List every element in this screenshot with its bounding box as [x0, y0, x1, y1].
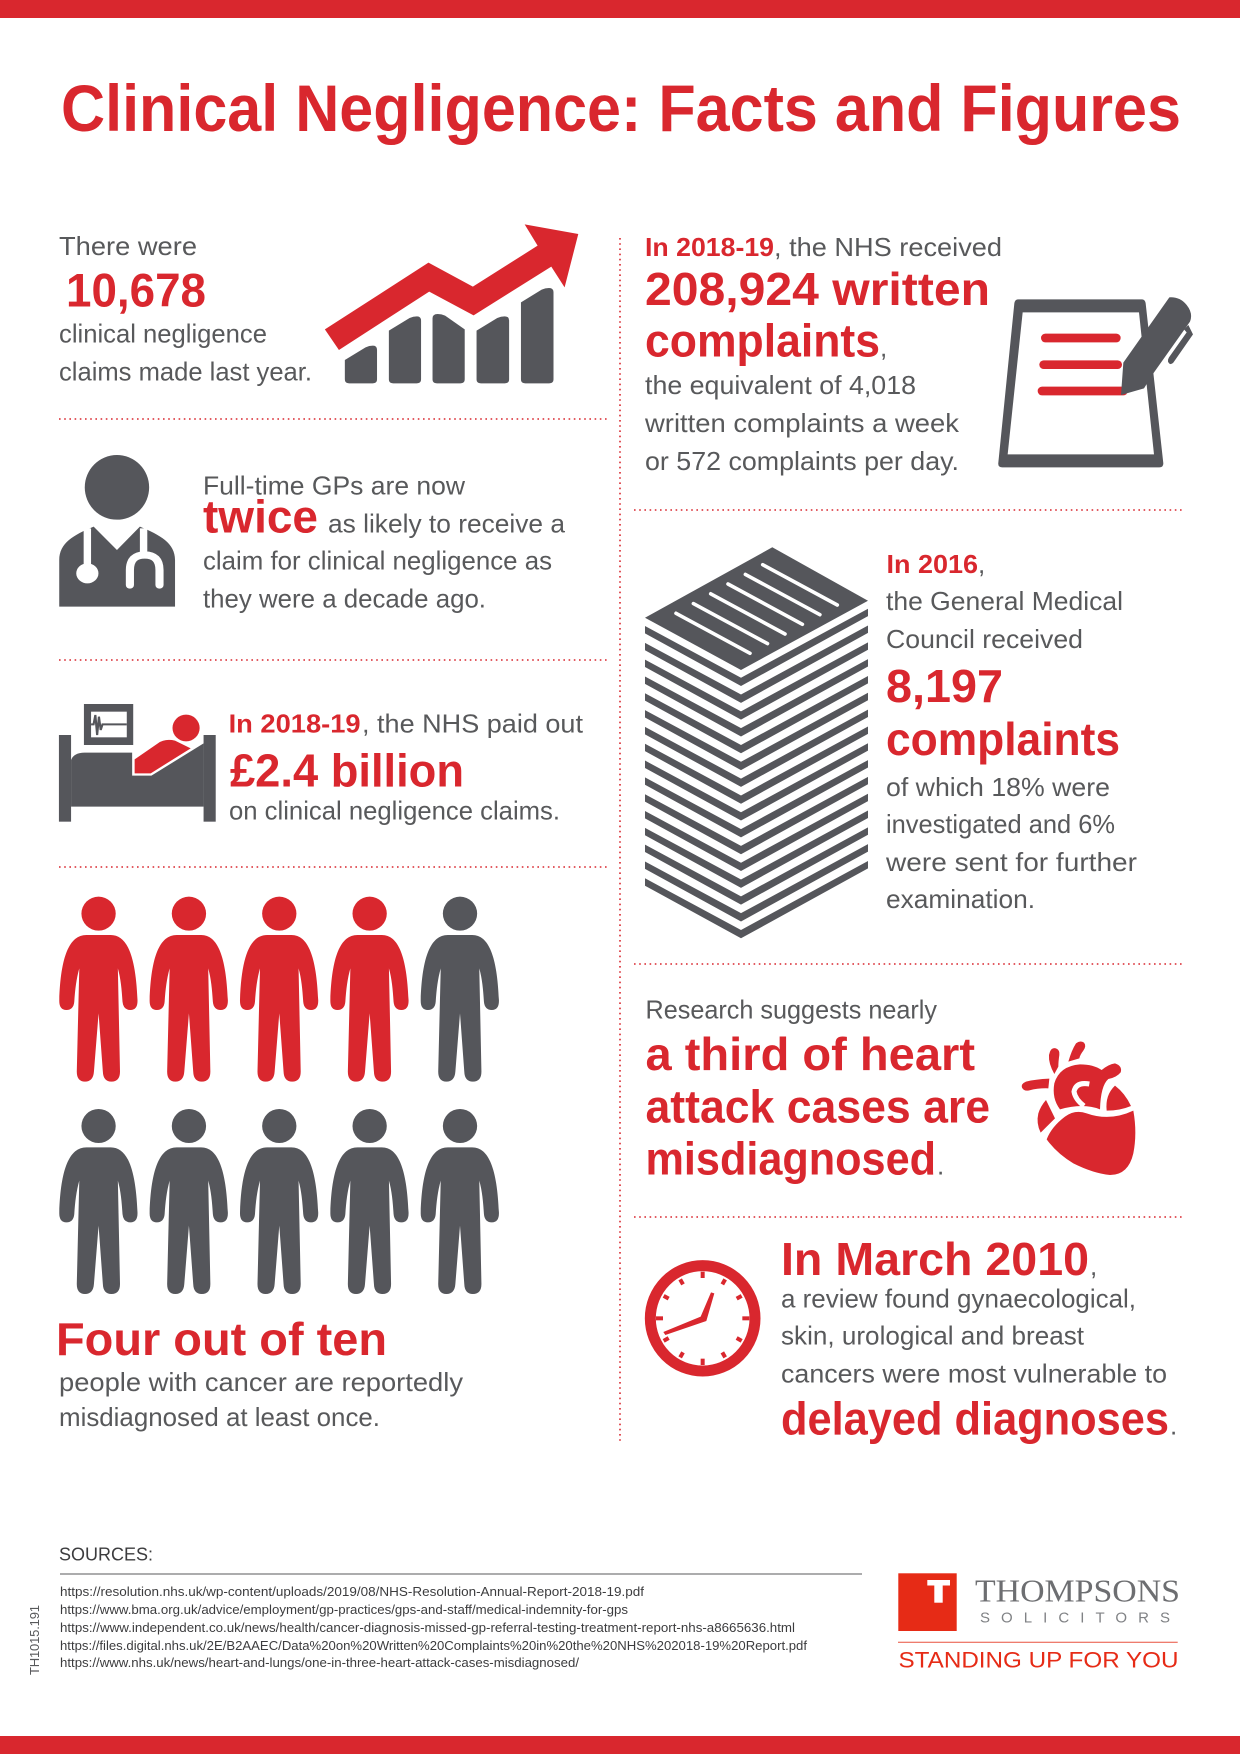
text: written complaints: 208,924 written — [645, 263, 990, 315]
text: GP claims: Full-time GPs are now — [203, 471, 465, 501]
text: written complaints: or 572 complaints per day. — [645, 446, 959, 476]
text: GMC complaints: Council received — [886, 624, 1083, 654]
text: GMC complaints: 8,197 — [886, 660, 1003, 712]
text: delayed diagnoses: , — [1090, 1251, 1097, 1281]
logo subline: SOLICITORS — [980, 1610, 1170, 1627]
panel: claims made — [59, 224, 578, 387]
icon: clock — [650, 1266, 755, 1371]
text: NHS payout — [229, 709, 584, 825]
text: written complaints: , — [880, 333, 887, 363]
text: GP claims — [203, 471, 566, 613]
title: Clinical Negligence: Facts and Figures — [61, 71, 1181, 145]
text: claims made: 10,678 — [66, 264, 206, 317]
text: GMC complaints: of which 18% were — [886, 772, 1110, 802]
logo mark — [898, 1573, 957, 1631]
text: GMC complaints: investigated and 6% — [886, 809, 1115, 839]
text: heart attack: . — [937, 1150, 944, 1180]
text: heart attack: misdiagnosed — [646, 1132, 936, 1184]
text: delayed diagnoses: a review found gynaecological, — [781, 1283, 1136, 1313]
text: GP claims: as likely to receive a — [328, 508, 566, 538]
panel: sources — [59, 1545, 862, 1670]
text: heart attack: Research suggests nearly — [646, 994, 937, 1024]
text: GMC complaints: examination. — [886, 884, 1035, 914]
text: written complaints — [644, 232, 1002, 476]
source links list: https://www.independent.co.uk/news/health/cancer-diagnosis-missed-gp-referral-testing-treatment-report-nhs-a8665636.html — [60, 1620, 795, 1635]
pictogram: ten people, four red — [59, 897, 499, 1294]
text: delayed diagnoses: In March 2010 — [781, 1233, 1089, 1285]
icon: doctor with stethoscope — [59, 455, 175, 607]
text: delayed diagnoses: . — [1170, 1410, 1177, 1440]
panel: heart attack — [646, 994, 1135, 1184]
source links list: https://www.bma.org.uk/advice/employment/gp-practices/gps-and-staff/medical-indemnity-for-gps — [60, 1602, 628, 1617]
source links list: https://files.digital.nhs.uk/2E/B2AAEC/Data%20on%20Written%20Complaints%20in%20the%20NHS%202018-19%20Report.pdf — [60, 1638, 807, 1653]
icon: patient in hospital bed — [59, 704, 216, 822]
text: written complaints: , the NHS received — [774, 232, 1002, 262]
icon: stack of papers — [645, 547, 868, 938]
text: claims made: There were — [59, 231, 197, 261]
panel: delayed diagnoses — [650, 1233, 1177, 1444]
heading: sources: SOURCES: — [59, 1545, 153, 1565]
text: delayed diagnoses: cancers were most vulnerable to — [781, 1358, 1167, 1388]
text: GMC complaints: were sent for further — [885, 847, 1137, 877]
bottom red band — [0, 1736, 1240, 1754]
text: written complaints: complaints — [645, 315, 880, 367]
text: heart attack — [646, 994, 990, 1184]
logo: Thompsons Solicitors — [898, 1573, 1180, 1673]
text: claims made: clinical negligence — [59, 319, 267, 349]
panel: NHS payout — [59, 704, 584, 825]
panel: GMC complaints — [645, 547, 1137, 938]
top red band — [0, 0, 1240, 18]
text: claims made — [59, 231, 312, 387]
panel: four out of ten — [56, 897, 499, 1432]
panel: written complaints — [644, 232, 1193, 476]
text: written complaints: written complaints a week — [644, 408, 960, 438]
icon: anatomical heart — [1022, 1041, 1135, 1175]
text: written complaints: the equivalent of 4,018 — [645, 370, 916, 400]
icon: rising bar chart with arrow — [325, 224, 578, 383]
text: written complaints: In 2018-19 — [645, 232, 774, 262]
text: NHS payout: £2.4 billion — [230, 745, 464, 797]
text: four out of ten: misdiagnosed at least once. — [59, 1402, 380, 1432]
text: delayed diagnoses: skin, urological and breast — [781, 1320, 1085, 1350]
text: GMC complaints: the General Medical — [886, 586, 1123, 616]
text: NHS payout: , the NHS paid out — [362, 709, 584, 739]
logo wordmark: THOMPSONS — [975, 1573, 1180, 1609]
icon: notepad and pen — [998, 297, 1193, 467]
source links list: https://www.nhs.uk/news/heart-and-lungs/one-in-three-heart-attack-cases-misdiagnosed/ — [60, 1655, 579, 1670]
text: GP claims: twice — [203, 490, 318, 542]
text: GMC complaints: , — [978, 549, 985, 579]
text: claims made: claims made last year. — [59, 357, 312, 387]
source links list: https://resolution.nhs.uk/wp-content/uploads/2019/08/NHS-Resolution-Annual-Report-2018-19.pdf — [60, 1584, 644, 1599]
panel: GP claims — [59, 455, 566, 613]
text: four out of ten: people with cancer are reportedly — [59, 1367, 463, 1397]
text: GP claims: they were a decade ago. — [203, 583, 486, 613]
text: GP claims: claim for clinical negligence as — [203, 545, 552, 575]
text: NHS payout: on clinical negligence claims. — [229, 795, 560, 825]
text: delayed diagnoses: delayed diagnoses — [781, 1392, 1169, 1444]
text: NHS payout: In 2018-19 — [229, 709, 361, 739]
text: GMC complaints — [885, 549, 1137, 914]
text: heart attack: a third of heart — [646, 1028, 975, 1080]
source links list — [60, 1584, 807, 1670]
text: four out of ten — [56, 1313, 463, 1432]
text: GMC complaints: In 2016 — [886, 549, 978, 579]
text: GMC complaints: complaints — [886, 713, 1120, 765]
text: delayed diagnoses — [781, 1233, 1177, 1444]
logo tagline: STANDING UP FOR YOU — [898, 1648, 1178, 1673]
reference code: TH1015.191 — [27, 1605, 42, 1675]
text: four out of ten: Four out of ten — [56, 1313, 387, 1365]
text: heart attack: attack cases are — [646, 1081, 990, 1133]
